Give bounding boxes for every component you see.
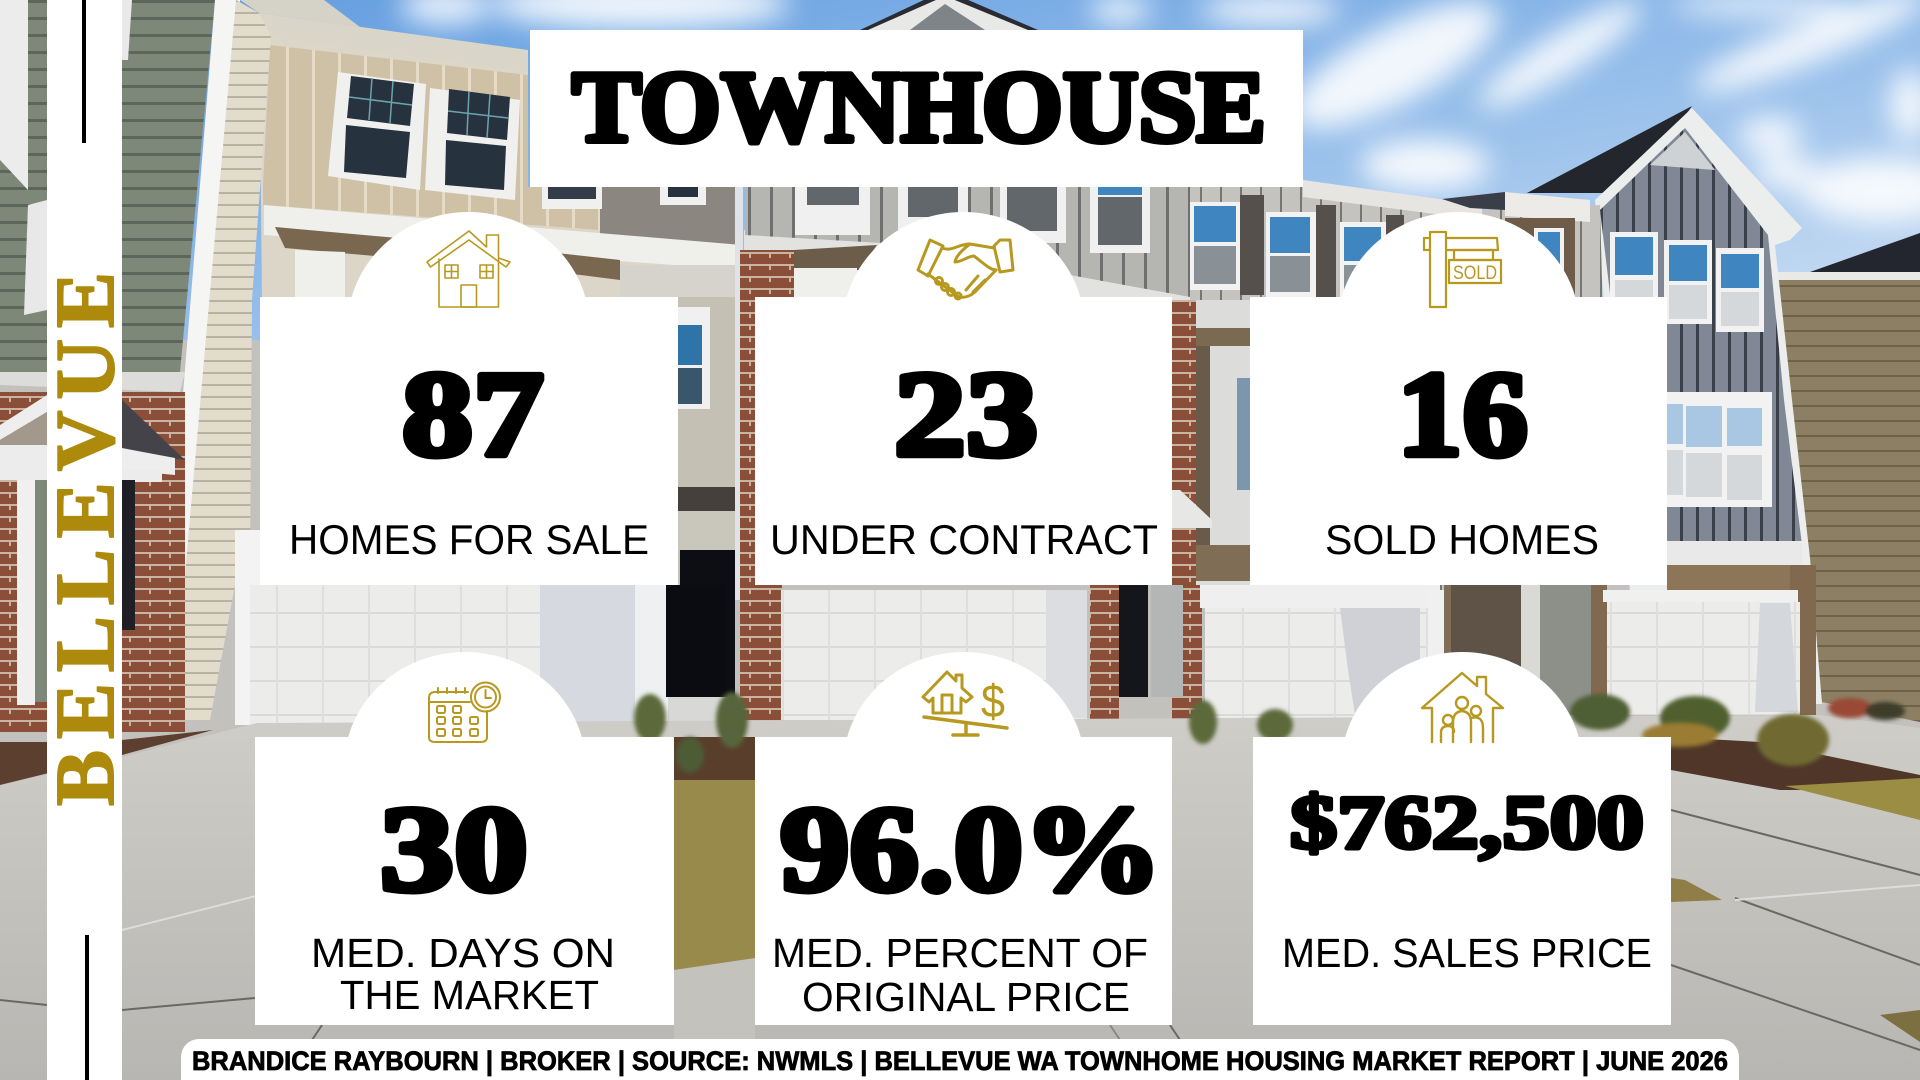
icon: calendar and clock: [429, 682, 500, 742]
beige left house: [240, 0, 360, 27]
icon: sold sign: [1424, 232, 1501, 307]
label: MED. SALES PRICE: [1282, 930, 1652, 976]
icon: house price balance: [923, 672, 1007, 735]
garages: [235, 530, 265, 725]
right gable: [1527, 106, 1692, 193]
icon text: SOLD: SOLD: [1453, 263, 1497, 284]
panel: median percent of original price: [755, 652, 1172, 1025]
label: [772, 930, 1148, 1020]
beige windows: [328, 72, 520, 200]
value: 30: [380, 782, 528, 917]
label: MED. DAYS ON: [311, 930, 615, 976]
footer text: BRANDICE RAYBOURN | BROKER | SOURCE: NWMLS | BELLEVUE WA TOWNHOME HOUSING MARKET REPORT | JUNE 2026: [192, 1046, 1728, 1076]
label: HOMES FOR SALE: [289, 516, 649, 563]
center gray section: [744, 230, 1190, 300]
footer source bar: [181, 1039, 1739, 1080]
panel: median sales price: [1253, 652, 1671, 1025]
value: 16: [1397, 347, 1528, 482]
value: 96.0%: [780, 782, 1162, 917]
value: 87: [402, 347, 544, 482]
value: 23: [894, 347, 1038, 482]
value: $762,500: [1290, 781, 1644, 865]
panel: under contract: [755, 212, 1172, 585]
center gable above title: [860, 0, 1038, 30]
label: MED. PERCENT OF: [772, 930, 1148, 976]
sidebar heading: city name: BELLEVUE: [39, 272, 132, 806]
far right olive building: [1810, 233, 1920, 272]
label: ORIGINAL PRICE: [802, 974, 1130, 1020]
left green house: [0, 0, 215, 372]
label: UNDER CONTRACT: [770, 516, 1158, 563]
top accent line: [82, 0, 86, 143]
label: THE MARKET: [340, 972, 599, 1018]
title: TOWNHOUSE: [572, 51, 1266, 164]
label: [311, 930, 615, 1018]
stone band: [1667, 541, 1802, 565]
left sidebar: [39, 0, 132, 1080]
icon: house: [427, 231, 510, 307]
icon dollar sign: $: [981, 675, 1005, 727]
bottom accent line: [85, 935, 89, 1080]
panel: median days on market: [255, 652, 674, 1025]
concrete joints: [0, 810, 1920, 1050]
icon: handshake: [918, 240, 1013, 299]
panel: sold homes: [1250, 212, 1667, 585]
icon: family in house: [1422, 673, 1503, 742]
title panel: [530, 30, 1303, 187]
panel: homes for sale: [260, 212, 678, 585]
center right block: [1180, 187, 1610, 590]
ground: [0, 715, 1920, 1080]
windows upper right: [1190, 202, 1772, 507]
bushes: [634, 692, 1905, 773]
gutter and bricks between cards: [678, 297, 743, 597]
label: SOLD HOMES: [1325, 516, 1599, 563]
